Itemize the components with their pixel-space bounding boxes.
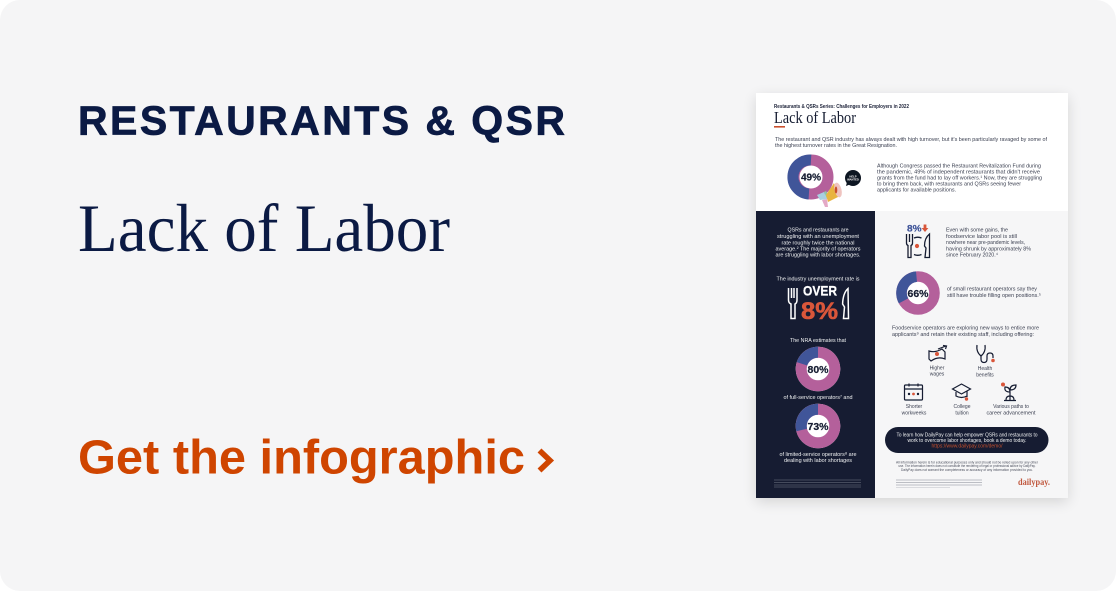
icon: graduation cap	[952, 384, 970, 401]
infographic thumbnail	[756, 93, 1068, 502]
callout: book a demo: work to overcome labor shortages, book a demo today.	[907, 438, 1026, 444]
donut chart: 73%	[796, 404, 840, 448]
labor pool paragraph: having shrunk by approximately 8%	[946, 246, 1031, 252]
donut chart: 66%: 66%	[907, 288, 929, 300]
label: health benefits: Health	[978, 366, 992, 372]
offerings intro	[892, 326, 1039, 338]
speech bubble: help wanted: HELP	[849, 174, 857, 178]
icon: fork	[788, 288, 797, 318]
speech bubble: help wanted	[845, 170, 861, 186]
unemployment paragraph: QSRs and restaurants are	[788, 228, 848, 234]
label: college tuition: College	[954, 404, 971, 410]
icon: megaphone	[817, 182, 843, 207]
label: college tuition: tuition	[955, 410, 969, 416]
stat: over 8%: OVER	[803, 283, 837, 299]
label: career paths	[986, 404, 1036, 416]
small operators text	[947, 287, 1041, 299]
small operators text: still have trouble filling open positions.⁵	[947, 293, 1041, 299]
fund paragraph: to bring them back, with restaurants and QSRs seeing fewer	[877, 182, 1021, 188]
NRA label: The NRA estimates that	[790, 338, 846, 344]
label: career paths: career advancement	[986, 410, 1036, 416]
disclaimer: DailyPay does not warrant the completeness or accuracy of any information provided to you.	[901, 468, 1033, 472]
thumbnail series label: Restaurants & QSRs Series: Challenges for Employers in 2022	[774, 104, 909, 110]
donut chart: 49%	[793, 160, 828, 194]
unemployment paragraph: are struggling with labor shortages.	[776, 252, 860, 258]
unemployment paragraph: average.² The majority of operators	[776, 246, 861, 252]
labor pool paragraph: foodservice labor pool is still	[946, 234, 1017, 240]
small operators text: of small restaurant operators say they	[947, 287, 1037, 293]
limited-service label	[780, 452, 856, 464]
label: shorter workweeks	[902, 404, 927, 416]
call to action: Get the infographic	[78, 432, 525, 485]
fund paragraph: applicants for available positions.	[877, 187, 956, 193]
unemployment label: The industry unemployment rate is	[776, 277, 860, 283]
label: career paths: Various paths to	[993, 404, 1029, 410]
icon: higher wages	[929, 346, 946, 361]
callout: book a demo	[885, 427, 1048, 453]
donut chart: 80%	[796, 347, 840, 391]
unemployment paragraph	[776, 228, 861, 258]
callout: book a demo: https://www.dailypay.com/demo/	[932, 443, 1003, 449]
fund paragraph: grants from the fund had to lay off workers.¹ Now, they are struggling	[877, 176, 1042, 182]
icon: plant	[1001, 382, 1016, 400]
icon: stethoscope	[977, 345, 995, 362]
icon: down arrow	[922, 224, 928, 232]
thumbnail title: Lack of Labor	[774, 108, 856, 127]
intro paragraph	[775, 137, 1047, 149]
eyebrow heading: RESTAURANTS & QSR	[78, 97, 565, 143]
label: college tuition	[954, 404, 971, 416]
limited-service label: of limited-service operators⁸ are	[780, 452, 856, 458]
icon: calendar	[904, 384, 922, 400]
icon: knife	[843, 288, 848, 318]
label: shorter workweeks: Shorter	[906, 404, 923, 410]
label: higher wages: wages	[930, 372, 945, 378]
offerings intro: applicants⁹ and retain their existing staff, including offering:	[892, 332, 1034, 338]
unemployment paragraph: rate roughly twice the national	[782, 240, 854, 246]
donut chart: 80%: 80%	[807, 364, 829, 376]
logo: dailypay: dailypay.	[1018, 477, 1050, 487]
panel: dark unemployment column	[756, 211, 875, 498]
label: health benefits	[976, 366, 994, 379]
label: health benefits: benefits	[976, 373, 994, 379]
speech bubble: help wanted: WANTED	[847, 177, 859, 181]
label: higher wages: Higher	[930, 365, 945, 371]
labor pool paragraph: nowhere near pre-pandemic levels,	[946, 240, 1025, 246]
offerings intro: Foodservice operators are exploring new ways to entice more	[892, 326, 1039, 332]
disclaimer: All information herein is for educational purposes only and should not be relied upon for any other	[896, 461, 1039, 465]
unemployment paragraph: struggling with an unemployment	[777, 234, 860, 240]
donut chart: 66%	[896, 271, 940, 315]
icon: chevron	[540, 450, 550, 470]
intro paragraph: The restaurant and QSR industry has always dealt with high turnover, but it's been particularly ravaged by some of	[775, 137, 1047, 143]
full-service label: of full-service operators⁷ and	[784, 395, 853, 401]
donut chart: 49%: 49%	[801, 173, 821, 184]
stat: 8% down	[907, 224, 928, 235]
panel: header intro	[774, 104, 1047, 207]
stat: over 8%	[801, 283, 838, 325]
labor pool paragraph: since February 2020.⁴	[946, 252, 999, 258]
disclaimer: use. The information herein does not constitute the rendering of legal or professional advice by DailyPay.	[898, 464, 1036, 468]
icon: place setting	[906, 234, 930, 258]
labor pool paragraph: Even with some gains, the	[946, 228, 1008, 234]
label: higher wages	[930, 365, 945, 378]
callout: book a demo: To learn how DailyPay can help empower QSRs and restaurants to	[896, 432, 1038, 438]
stat: over 8%: 8%	[801, 298, 838, 325]
title accent bar	[774, 126, 785, 128]
limited-service label: dealing with labor shortages	[784, 458, 852, 464]
fund paragraph	[877, 164, 1042, 193]
stat: 8% down: 8%	[907, 224, 922, 235]
fund paragraph: the pandemic, 49% of independent restaurants that didn't receive	[877, 170, 1040, 176]
label: shorter workweeks: workweeks	[902, 410, 927, 416]
labor pool paragraph	[946, 228, 1031, 258]
intro paragraph: the highest turnover rates in the Great Resignation.	[775, 143, 897, 149]
fund paragraph: Although Congress passed the Restaurant Revitalization Fund during	[877, 164, 1041, 170]
donut chart: 73%: 73%	[807, 421, 829, 433]
disclaimer	[896, 461, 1039, 472]
panel: right column	[885, 224, 1050, 487]
main title: Lack of Labor	[78, 190, 450, 266]
